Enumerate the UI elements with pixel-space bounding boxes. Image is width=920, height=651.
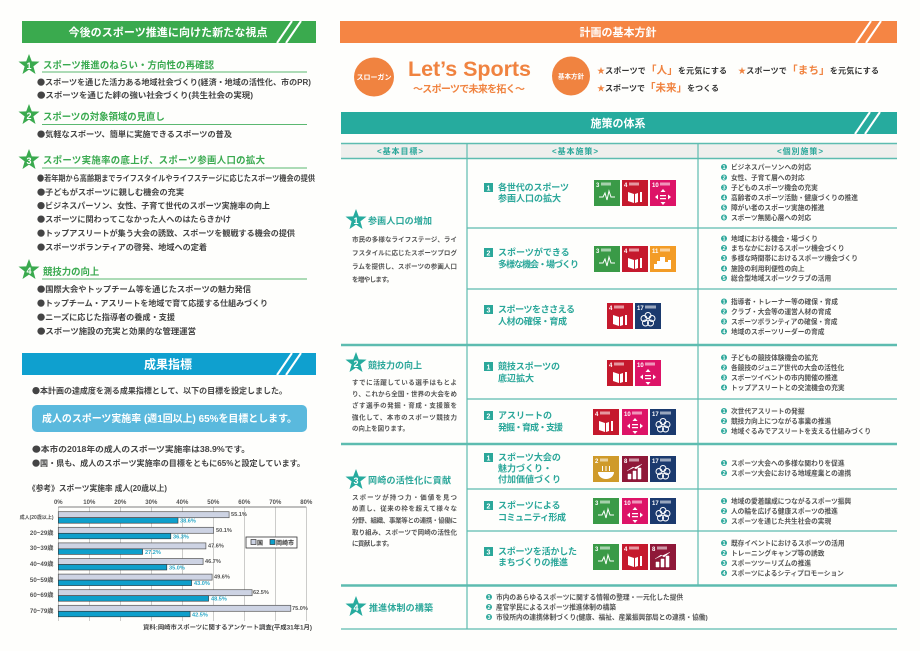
section 4: competitiveness: 競技力の向上 (43, 266, 99, 277)
Okazaki city bars (58, 518, 209, 617)
badge: slogan (354, 58, 394, 96)
individual measures row 4: 2 (722, 366, 726, 372)
goal 2: competitiveness: の向上を図ります。 (352, 424, 409, 432)
goal 3: Okazaki vitalization: に貢献します。 (352, 538, 393, 548)
SDG icons row 7: 3 (595, 501, 599, 507)
policy statements (597, 64, 879, 94)
panel: basic policy (340, 21, 897, 96)
individual measures row 2: 総合型地域スポーツクラブの活用 (731, 274, 831, 282)
table header (341, 144, 897, 158)
source note: 資料:岡崎市スポーツに関するアンケート調査(平成31年1月) (143, 624, 312, 632)
section 1: aims and direction (18, 54, 311, 101)
table header: <基本目標> (377, 146, 423, 156)
individual measures row 1: 子どものスポーツ機会の充実 (731, 183, 818, 192)
individual measures row 2: 地域における機会・場づくり (731, 234, 818, 243)
chart title: 《参考》スポーツ実施率 成人(20歳以上) (28, 483, 167, 493)
value labels: 62.5% (253, 590, 269, 596)
section 3: raising participation: ●スポーツに関わってこなかった人へのはたらきかけ (37, 214, 231, 225)
heading: basic policy banner: 計画の基本方針 (580, 25, 656, 39)
individual measures row 1: 2 (722, 176, 726, 182)
national bars (58, 512, 291, 611)
section 3: raising participation: ●スポーツボランティアの啓発、地域への定着 (37, 242, 207, 253)
panel: outcome indicators (20, 353, 316, 632)
individual measures row 2: 施設の利用利便性の向上 (731, 264, 805, 273)
axis labels (54, 500, 313, 506)
basic measure 3-1: スポーツ大会の (498, 452, 561, 462)
value labels: 50.1% (216, 528, 232, 534)
goal 3: Okazaki vitalization: 岡崎の活性化に貢献 (368, 474, 451, 486)
individual measures row 8: 3 (722, 561, 726, 567)
goal 1: participation: を増やします。 (352, 274, 393, 284)
category labels: 40~49歳 (30, 560, 54, 568)
individual measures row 1: 5 (722, 206, 726, 212)
SDG icons row 6 (593, 456, 676, 482)
individual measures row 5: 2 (722, 419, 726, 425)
individual measures row 3: 地域のスポーツリーダーの育成 (731, 327, 825, 336)
bar chart: sports participation rate (20, 483, 313, 632)
individual measures row 3: 1 (722, 300, 726, 306)
goal 1: participation (346, 209, 458, 284)
category labels: 60~69歳 (30, 591, 54, 599)
goal 2: competitiveness (346, 352, 458, 432)
basic measure 3-2: 2 (487, 504, 491, 510)
axis labels: 40% (176, 500, 189, 506)
promotion system measures: 2 (487, 605, 491, 611)
legend: 岡崎市 (276, 539, 294, 547)
promotion system measures: 3 (487, 615, 491, 621)
individual measures row 1: スポーツ無関心層への対応 (731, 213, 811, 222)
section 3: raising participation (18, 149, 315, 253)
SDG icons row 1 (594, 180, 676, 206)
individual measures row 4: 4 (722, 386, 726, 392)
SDG icons row 5: 10 (624, 412, 631, 418)
individual measures row 1: 高齢者のスポーツ活動・健康づくりの推進 (731, 193, 858, 202)
basic measure 2-2: 2 (487, 414, 491, 420)
callout: 65% target: 成人のスポーツ実施率 (週1回以上) 65%を目標とします。 (42, 412, 297, 425)
SDG icons row 1: 10 (652, 183, 659, 189)
category labels: 70~79歳 (30, 607, 54, 615)
text: indicator intro: ●本計画の達成度を測る成果指標として、以下の目標を設定しました。 (32, 386, 287, 396)
individual measures row 8: 既存イベントにおけるスポーツの活用 (731, 538, 845, 548)
basic measure 2-1: 底辺拡大 (498, 372, 534, 384)
table grid (341, 143, 897, 629)
goal 1: participation: フスタイルに応じたスポーツプログ (352, 248, 458, 257)
badge: basic policy: 基本方針 (558, 72, 584, 80)
individual measures row 2: 3 (722, 256, 726, 262)
individual measures row 3: 2 (722, 310, 726, 316)
SDG icons row 8: 8 (652, 547, 656, 553)
goal 3: Okazaki vitalization: スポーツが持つ力・価値を見つ (352, 492, 458, 502)
value labels: 48.5% (211, 596, 227, 602)
SDG icons row 5: 17 (652, 412, 659, 418)
SDG icons row 3: 4 (609, 306, 613, 312)
basic measure 2-1: 競技スポーツの (498, 360, 560, 372)
section 2: target area (18, 104, 307, 140)
SDG icons row 7: 10 (624, 501, 631, 507)
SDG icons row 6: 8 (624, 459, 628, 465)
category labels: 50~59歳 (30, 576, 54, 584)
individual measures row 8: 2 (722, 551, 726, 557)
individual measures row 7: 1 (722, 499, 726, 505)
policy statements: ★スポーツで「未来」をつくる (597, 81, 719, 94)
section 2: target area: ●気軽なスポーツ、簡単に実施できるスポーツの普及 (37, 129, 232, 140)
individual measures row 3: 3 (722, 320, 726, 326)
individual measures row 1: ビジネスパーソンへの対応 (731, 162, 812, 172)
slogan text (408, 57, 531, 96)
section 3: raising participation: ●トップアスリートが集う大会の誘致、スポーツを観戦する機会の提供 (37, 228, 295, 239)
SDG icons row 2 (594, 246, 676, 272)
policy statements: ★スポーツで「まち」を元気にする (738, 64, 879, 76)
goal 4: promotion system: 推進体制の構築 (369, 602, 433, 613)
individual measures row 7 (721, 496, 852, 526)
individual measures row 4: 子どもの競技体験機会の拡充 (731, 353, 818, 362)
text: current rate notes (32, 444, 305, 469)
section 4: competitiveness: 4 (26, 266, 32, 276)
individual measures row 5: 1 (722, 409, 726, 415)
SDG icons row 1: 3 (596, 183, 600, 189)
basic measure 1-2: スポーツができる (498, 246, 570, 258)
axis labels: 60% (238, 500, 251, 506)
category labels: 成人(20歳以上) (20, 514, 54, 521)
axis labels: 10% (83, 500, 96, 506)
goal 2: competitiveness: 2 (353, 359, 359, 369)
SDG icons row 4: 10 (637, 363, 644, 369)
individual measures row 7: 人の輪を広げる健康スポーツの推進 (731, 506, 838, 516)
section 3: raising participation: 3 (26, 156, 32, 166)
basic measure 1-3 (484, 304, 575, 326)
goal 3: Okazaki vitalization (346, 469, 458, 548)
individual measures row 6: スポーツ大会における地域産業との連携 (731, 468, 851, 478)
individual measures row 6 (721, 458, 851, 478)
individual measures row 5 (721, 406, 871, 436)
individual measures row 2: まちなかにおけるスポーツ機会づくり (731, 244, 845, 252)
individual measures row 2: 多様な時間帯におけるスポーツ機会づくり (731, 254, 858, 262)
individual measures row 7: 2 (722, 509, 726, 515)
SDG icons row 5 (593, 409, 676, 435)
heading: new perspectives banner: 今後のスポーツ推進に向けた新たな視点 (68, 25, 268, 39)
basic measure 3-1: 1 (487, 456, 491, 462)
promotion system measures: 1 (487, 595, 491, 601)
value labels: 42.5% (192, 612, 208, 618)
individual measures row 2: 1 (722, 236, 726, 242)
individual measures row 6: スポーツ大会への多様な関わりを促進 (731, 458, 845, 468)
individual measures row 8: トレーニングキャンプ等の誘致 (731, 548, 825, 558)
slogan text: Let’s Sports (408, 57, 531, 81)
individual measures row 3: クラブ・大会等の運営人材の育成 (731, 307, 832, 316)
value labels: 55.1% (231, 512, 247, 518)
value labels: 38.6% (180, 518, 196, 524)
category labels: 30~39歳 (30, 544, 54, 552)
individual measures row 7: 地域の愛着醸成につながるスポーツ振興 (731, 496, 852, 506)
basic measure 3-1: 魅力づくり・ (498, 462, 552, 474)
goal 2: competitiveness: り、これから全国・世界の大会をめ (352, 389, 458, 398)
individual measures row 3 (721, 297, 838, 336)
section 1: aims and direction: ●スポーツを通じた絆の強い社会づくり(共生社会の実現) (37, 90, 253, 101)
SDG icons row 7: 17 (652, 501, 659, 507)
SDG icons row 5: 4 (595, 412, 599, 418)
slogan text: ～スポーツで未来を拓く～ (413, 80, 525, 96)
individual measures row 2: 4 (722, 266, 726, 272)
SDG icons row 8 (593, 544, 676, 570)
table header: <個別施策> (777, 146, 823, 156)
individual measures row 4: 各競技のジュニア世代の大会の活性化 (731, 363, 845, 372)
individual measures row 5: 競技力向上につながる事業の推進 (731, 416, 832, 426)
category labels (20, 514, 54, 615)
individual measures row 1: 1 (722, 165, 726, 171)
section 4: competitiveness (18, 259, 307, 337)
goal 2: competitiveness: すでに活躍している選手はもとよ (352, 378, 457, 386)
value labels: 27.2% (145, 550, 161, 556)
section 1: aims and direction: ●スポーツを通じた活力ある地域社会づくり(経済・地域の活性化、市のPR) (37, 77, 311, 88)
individual measures row 1 (721, 162, 858, 222)
basic measure 1-1: 参画人口の拡大 (498, 192, 561, 204)
SDG icons row 2: 3 (596, 249, 600, 255)
badge: slogan: スローガン (356, 72, 392, 82)
basic measure 2-2: 発掘・育成・支援 (498, 422, 563, 432)
basic measure 3-3: 3 (487, 550, 491, 556)
goal 2: competitiveness: 競技力の向上 (368, 360, 422, 370)
individual measures row 5: 次世代アスリートの発掘 (731, 406, 805, 416)
SDG icons row 6: 17 (652, 459, 659, 465)
callout: 65% target (32, 405, 307, 432)
basic measure 3-2 (484, 500, 566, 522)
section 1: aims and direction: スポーツ推進のねらい・方向性の再確認 (43, 60, 215, 70)
basic measure 1-2: 2 (487, 250, 491, 258)
value labels: 47.6% (208, 544, 224, 550)
value labels: 46.7% (205, 559, 221, 565)
goal 1: participation: 市民の多様なライフステージ、ライ (352, 234, 457, 244)
individual measures row 1: 6 (722, 216, 726, 222)
value labels: 43.0% (194, 581, 210, 587)
section 3: raising participation: ●若年期から高齢期までライフスタイルやライフステージに応じたスポーツ機会の提供 (37, 173, 315, 184)
heading: system of measures banner: 施策の体系 (590, 116, 646, 130)
individual measures row 6: 1 (722, 461, 726, 467)
heading: system of measures banner (341, 112, 897, 134)
value labels: 75.0% (292, 606, 308, 612)
axis labels: 0% (54, 500, 63, 506)
individual measures row 1: 3 (722, 186, 726, 192)
SDG icons row 8: 4 (624, 547, 628, 553)
individual measures row 1: 4 (722, 196, 726, 202)
section 4: competitiveness: ●国際大会やトップチーム等を通じたスポーツの魅力発信 (37, 284, 251, 295)
individual measures row 2 (721, 234, 858, 282)
goal 4: promotion system: 4 (353, 603, 359, 613)
goal 2: competitiveness: ざす選手の発掘・育成・支援策を (352, 400, 457, 410)
basic measure 1-1 (484, 182, 569, 204)
value labels: 36.3% (173, 534, 189, 540)
section 3: raising participation: ●子どもがスポーツに親しむ機会の充実 (37, 187, 184, 198)
policy statements: ★スポーツで「人」を元気にする (597, 64, 727, 76)
individual measures row 8: 4 (722, 571, 726, 577)
section 3: raising participation: スポーツ実施率の底上げ、スポーツ参画人口の拡大 (43, 154, 266, 166)
individual measures row 4: 3 (722, 376, 726, 382)
individual measures row 3: 4 (722, 330, 726, 336)
heading: new perspectives banner (22, 21, 316, 43)
individual measures row 8: スポーツツーリズムの推進 (731, 558, 811, 568)
basic measure 1-3: 3 (487, 308, 491, 314)
individual measures row 6: 2 (722, 471, 726, 477)
SDG icons row 6: 2 (595, 459, 599, 465)
goal 2: competitiveness: 強化して、本市のスポーツ競技力 (352, 412, 457, 422)
section 4: competitiveness: ●ニーズに応じた指導者の養成・支援 (37, 312, 175, 323)
section 2: target area: 2 (26, 111, 32, 121)
SDG icons row 7 (593, 498, 676, 524)
individual measures row 5: 地域ぐるみでアスリートを支える仕組みづくり (731, 426, 871, 436)
axis labels: 20% (114, 500, 127, 506)
heading: basic policy banner (340, 21, 897, 43)
promotion system measures: 市内のあらゆるスポーツに関する情報の整理・一元化した提供 (496, 592, 683, 602)
SDG icons row 2: 4 (624, 249, 628, 255)
individual measures row 2: 2 (722, 246, 726, 252)
legend (246, 537, 297, 548)
individual measures row 2: 5 (722, 276, 726, 282)
goal 3: Okazaki vitalization: め直し、従来の枠を超えて様々な (352, 504, 458, 512)
individual measures row 3: 指導者・トレーナー等の確保・育成 (731, 297, 838, 306)
basic measure 1-3: スポーツをささえる (498, 304, 575, 314)
individual measures row 8: 1 (722, 541, 726, 547)
basic measure 2-2: アスリートの (498, 410, 552, 420)
section 4: competitiveness: ●スポーツ施設の充実と効果的な管理運営 (37, 326, 196, 337)
goal 4: promotion system (346, 596, 433, 616)
legend: 国 (257, 540, 263, 547)
heading: outcome indicators banner: 成果指標 (144, 356, 192, 372)
basic measure 3-3: スポーツを活かした (498, 546, 577, 556)
SDG icons row 1: 4 (624, 183, 628, 189)
basic measure 1-1: 各世代のスポーツ (498, 182, 569, 192)
basic measure 3-2: コミュニティ形成 (498, 512, 566, 522)
section 1: aims and direction: 1 (26, 61, 32, 71)
goal 3: Okazaki vitalization: 分野、組織、事業等との連携・協働に (352, 516, 457, 524)
promotion system measures: 産官学民によるスポーツ推進体制の構築 (496, 602, 616, 612)
individual measures row 8: スポーツによるシティプロモーション (731, 570, 844, 578)
text: current rate notes: ●国・県も、成人のスポーツ実施率の目標をともに65%と設定しています。 (32, 458, 305, 469)
basic measure 3-1: 付加価値づくり (498, 474, 561, 484)
text: current rate notes: ●本市の2018年の成人のスポーツ実施率は38.9%です。 (32, 444, 250, 455)
individual measures row 1: 障がい者のスポーツ実施の推進 (731, 203, 825, 212)
basic measure 1-2 (484, 246, 579, 270)
goal 1: participation: ラムを提供し、スポーツの参画人口 (352, 262, 457, 270)
SDG icons row 4 (607, 360, 661, 386)
basic measure 1-3: 人材の確保・育成 (498, 316, 567, 326)
individual measures row 4: スポーツイベントの市内開催の推進 (731, 373, 838, 382)
basic measure 1-1: 1 (487, 186, 491, 192)
axis labels: 30% (145, 500, 158, 506)
axis labels: 80% (300, 500, 313, 506)
SDG icons row 8: 3 (595, 547, 599, 553)
section 3: raising participation: ●ビジネスパーソン、女性、子育て世代のスポーツ実施率の向上 (37, 200, 270, 212)
value labels: 49.6% (214, 574, 230, 580)
heading: outcome indicators banner (22, 353, 316, 375)
basic measure 3-3: まちづくりの推進 (498, 556, 568, 568)
basic measure 3-3 (484, 546, 577, 568)
axis labels: 50% (207, 500, 220, 506)
value labels: 35.0% (169, 566, 185, 572)
basic measure 3-2: スポーツによる (498, 500, 561, 510)
section 2: target area: スポーツの対象領域の見直し (43, 111, 165, 122)
individual measures row 8 (721, 538, 845, 578)
promotion system measures (486, 592, 708, 622)
individual measures row 3: スポーツボランティアの確保・育成 (731, 317, 838, 326)
basic measure 2-1: 1 (487, 364, 491, 372)
individual measures row 7: スポーツを通じた共生社会の実現 (731, 516, 831, 526)
goal 1: participation: 1 (353, 216, 359, 226)
goal 1: participation: 参画人口の増加 (368, 215, 432, 226)
individual measures row 5: 3 (722, 429, 726, 435)
section 4: competitiveness: ●トップチーム・アスリートを地域で育て応援する仕組みづくり (37, 298, 268, 309)
individual measures row 4: トップアスリートとの交流機会の充実 (731, 383, 845, 392)
basic measure 2-1 (484, 360, 560, 384)
basic measure 1-2: 多様な機会・場づくり (498, 258, 579, 270)
basic measure 3-1 (484, 452, 561, 484)
individual measures row 1: 女性、子育て層への対応 (731, 173, 805, 182)
individual measures row 7: 3 (722, 519, 726, 525)
individual measures row 4 (721, 353, 845, 392)
SDG icons row 3 (607, 303, 661, 329)
SDG icons row 2: 11 (652, 249, 659, 255)
value labels (145, 512, 308, 618)
SDG icons row 4: 4 (609, 363, 613, 369)
individual measures row 4: 1 (722, 356, 726, 362)
panel: new perspectives (18, 21, 316, 337)
table header: <基本施策> (552, 146, 598, 156)
SDG icons row 3: 17 (637, 306, 644, 312)
panel: system of measures (341, 112, 897, 629)
axis labels: 70% (269, 500, 282, 506)
badge: basic policy (552, 56, 590, 96)
goal 3: Okazaki vitalization: 3 (353, 476, 359, 486)
category labels: 20~29歳 (30, 529, 54, 537)
promotion system measures: 市役所内の連携体制づくり(健康、福祉、産業振興部局との連携・協働) (496, 612, 708, 622)
goal 3: Okazaki vitalization: 取り組み、スポーツで岡崎の活性化 (352, 528, 458, 536)
basic measure 2-2 (484, 410, 563, 432)
